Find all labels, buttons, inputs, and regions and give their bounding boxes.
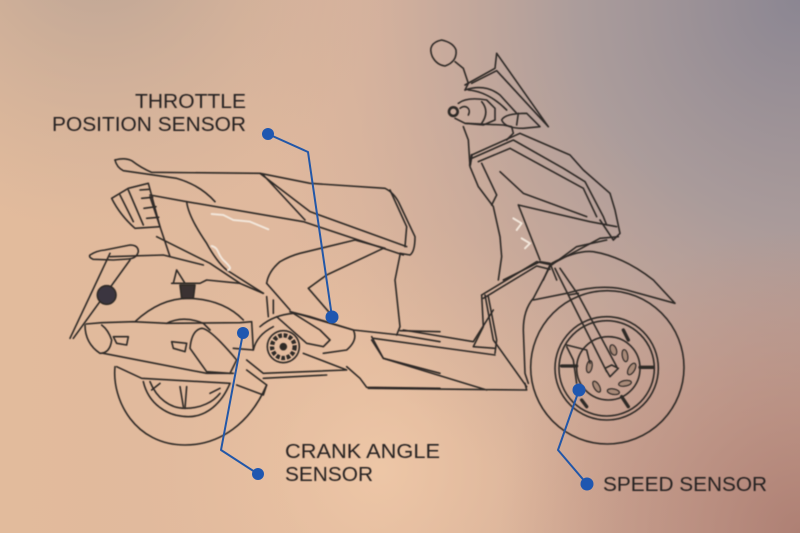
dot: crank label <box>252 468 264 480</box>
windscreen <box>465 53 548 127</box>
rear half of scooter <box>70 159 440 445</box>
brake caliper <box>567 345 590 383</box>
front lower half of scooter <box>368 240 684 444</box>
engine and pulley <box>237 297 355 395</box>
scooter line drawing <box>70 40 684 445</box>
dot: throttle label <box>262 128 274 140</box>
leader: crank angle sensor <box>221 333 258 474</box>
rear wheel <box>115 367 267 445</box>
front upper half of scooter <box>431 40 620 280</box>
dot: speed sensor <box>572 384 586 396</box>
label: crank angle sensor: SENSOR <box>285 464 373 486</box>
label: speed sensor: SPEED SENSOR <box>603 474 767 496</box>
mirror stem <box>455 62 468 90</box>
leader: speed sensor <box>558 390 587 484</box>
sensor leader lines <box>221 134 587 484</box>
tail light <box>112 183 170 257</box>
label: throttle position sensor: POSITION SENSOR <box>52 114 246 136</box>
front shield <box>463 127 620 280</box>
dot: speed label <box>580 478 594 490</box>
rear shock <box>172 270 240 298</box>
leader: throttle position sensor <box>268 134 332 317</box>
white badge marks <box>513 218 530 248</box>
mirror <box>431 40 456 66</box>
seat and rear body <box>115 159 440 388</box>
fender arc <box>135 298 243 322</box>
dot: throttle sensor <box>326 310 338 324</box>
label: crank angle sensor: CRANK ANGLE <box>285 441 440 463</box>
front fender <box>523 251 675 383</box>
front fork <box>555 268 618 377</box>
front wheel <box>531 291 684 444</box>
rear rack and number plate stalk <box>70 245 203 338</box>
white badge marks <box>212 214 268 270</box>
exhaust <box>85 319 253 383</box>
headlamp <box>449 88 540 140</box>
sensor dots <box>237 128 594 490</box>
dot: crank sensor <box>237 327 249 339</box>
leg shield and floor <box>368 240 607 390</box>
brake disc holes <box>586 344 637 395</box>
label: throttle position sensor: THROTTLE <box>135 91 246 113</box>
